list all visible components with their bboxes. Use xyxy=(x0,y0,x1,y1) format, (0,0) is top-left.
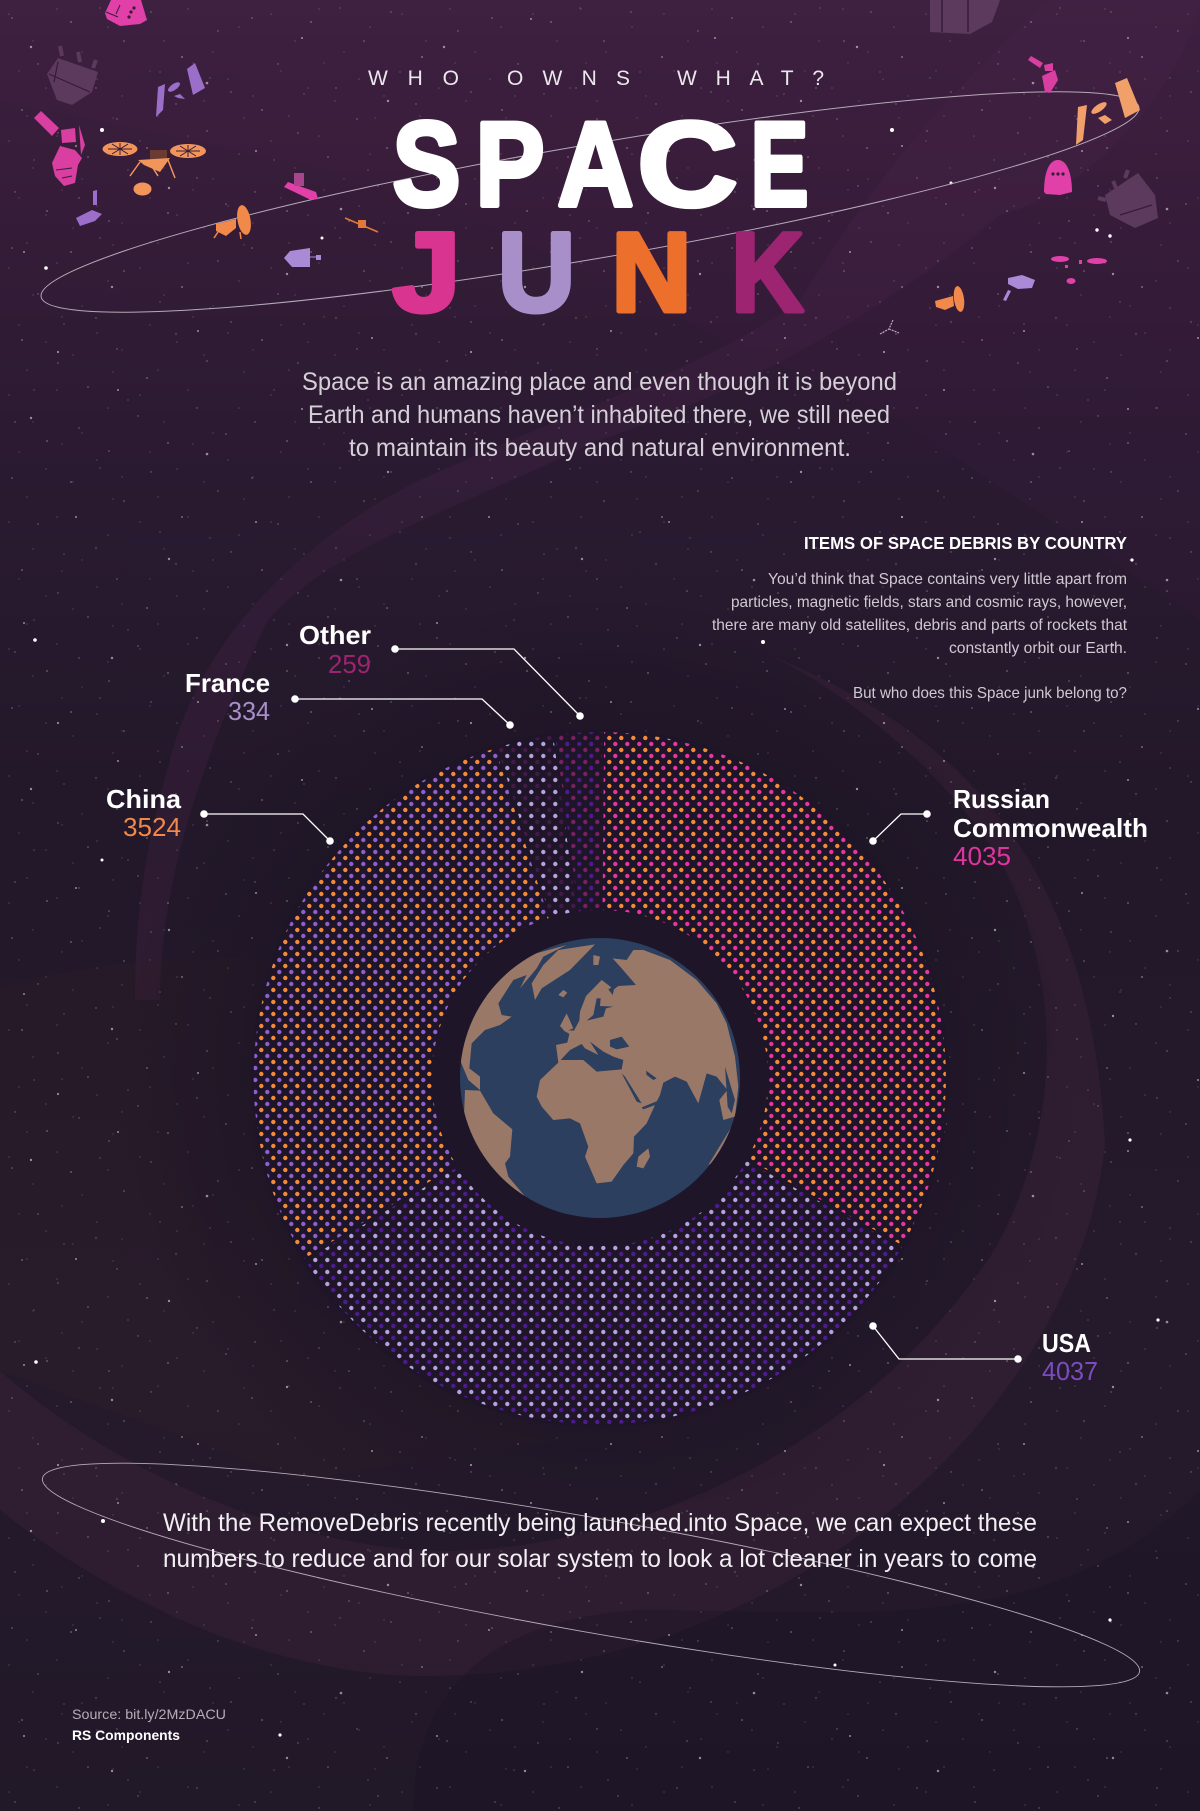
icon: small white fragment xyxy=(880,320,899,334)
kicker: who owns what: WHO xyxy=(368,67,459,90)
icon: lilac cylinder probe xyxy=(284,248,321,267)
icon: pink capsule top left xyxy=(105,0,147,26)
callout: China xyxy=(106,784,334,845)
icon: pink satellite right xyxy=(1028,56,1058,93)
title: space: E xyxy=(750,98,808,232)
title: junk xyxy=(392,210,804,335)
callout: France xyxy=(185,668,514,729)
title: space: A xyxy=(558,98,634,232)
icon: orange satellite right xyxy=(1076,78,1140,145)
callout: Russian Commonwealth xyxy=(869,784,1148,871)
title: space xyxy=(392,98,808,232)
intro text: to maintain its beauty and natural environment. xyxy=(349,434,851,462)
title: junk: K xyxy=(732,210,804,335)
icon: orange dish right xyxy=(935,285,966,313)
description text xyxy=(712,571,1128,702)
icon: pink module with grid xyxy=(284,173,318,200)
closing text: numbers to reduce and for our solar system to look a lot cleaner in years to come xyxy=(163,1545,1037,1573)
icon: orange dish left xyxy=(214,204,253,239)
intro text xyxy=(302,368,897,462)
segment: China xyxy=(253,747,600,1260)
callout: China: China xyxy=(106,784,182,814)
segment: Other xyxy=(554,731,603,1078)
kicker: who owns what xyxy=(368,67,824,90)
description text: You’d think that Space contains very little apart from xyxy=(768,571,1127,588)
earth globe xyxy=(460,938,740,1218)
intro text: Earth and humans haven’t inhabited there, we still need xyxy=(308,401,890,429)
title: junk: N xyxy=(612,210,692,335)
callout: Russian Commonwealth: Russian xyxy=(953,784,1050,814)
callout: Russian Commonwealth: Commonwealth xyxy=(953,813,1148,843)
intro text: Space is an amazing place and even though it is beyond xyxy=(302,368,897,396)
orbit ring: bottom xyxy=(33,1422,1149,1728)
icon: pink capsule right xyxy=(1044,160,1072,195)
source credit: Source: bit.ly/2MzDACU xyxy=(72,1706,226,1722)
closing text: With the RemoveDebris recently being launched into Space, we can expect these xyxy=(163,1509,1037,1537)
icon: lilac probe right xyxy=(1003,275,1035,301)
segment: France xyxy=(496,734,600,1078)
description text: there are many old satellites, debris and parts of rockets that xyxy=(712,617,1128,634)
callout: Other: 259 xyxy=(328,649,371,679)
callout: Russian Commonwealth: 4035 xyxy=(953,841,1011,871)
description text: constantly orbit our Earth. xyxy=(949,640,1127,657)
icon: orange lander left xyxy=(102,142,206,196)
segment: Russian Commonwealth xyxy=(600,731,947,1247)
title: junk: J xyxy=(392,210,460,335)
callout: France: France xyxy=(185,668,270,698)
icon: mauve telescope top right xyxy=(930,0,1000,34)
title: space: S xyxy=(392,98,460,232)
callout: USA: 4037 xyxy=(1042,1356,1098,1386)
heading: items of space debris by country: ITEMS OF SPACE DEBRIS BY COUNTRY xyxy=(804,533,1127,553)
callout: USA: USA xyxy=(1042,1328,1091,1358)
segment: USA xyxy=(304,1078,903,1425)
callout: France: 334 xyxy=(228,696,270,726)
icon: lilac probe left xyxy=(76,190,102,226)
closing text xyxy=(163,1509,1037,1573)
orbit ring: top xyxy=(31,51,1149,353)
callout: Other: Other xyxy=(299,620,371,650)
callout: USA xyxy=(869,1322,1098,1386)
icon: mauve telescope right xyxy=(1098,170,1158,228)
description text: But who does this Space junk belong to? xyxy=(853,685,1127,702)
source credit: RS Components xyxy=(72,1727,180,1743)
title: space: P xyxy=(476,98,544,232)
callout: China: 3524 xyxy=(123,812,181,842)
description text: particles, magnetic fields, stars and cosmic rays, however, xyxy=(731,594,1127,611)
title: space: C xyxy=(638,98,738,232)
icon: pink lander right xyxy=(1051,256,1107,284)
icon: orange antenna probe xyxy=(345,218,378,232)
icon: mauve telescope left xyxy=(47,46,98,105)
kicker: who owns what: WHAT? xyxy=(677,67,824,90)
icon: lilac satellite left xyxy=(156,63,205,117)
title: junk: U xyxy=(498,210,575,335)
pie chart: debris by country xyxy=(251,729,949,1427)
icon: pink satellite left xyxy=(34,111,85,186)
source credit xyxy=(72,1706,226,1743)
kicker: who owns what: OWNS xyxy=(507,67,630,90)
callout: Other xyxy=(299,620,584,720)
